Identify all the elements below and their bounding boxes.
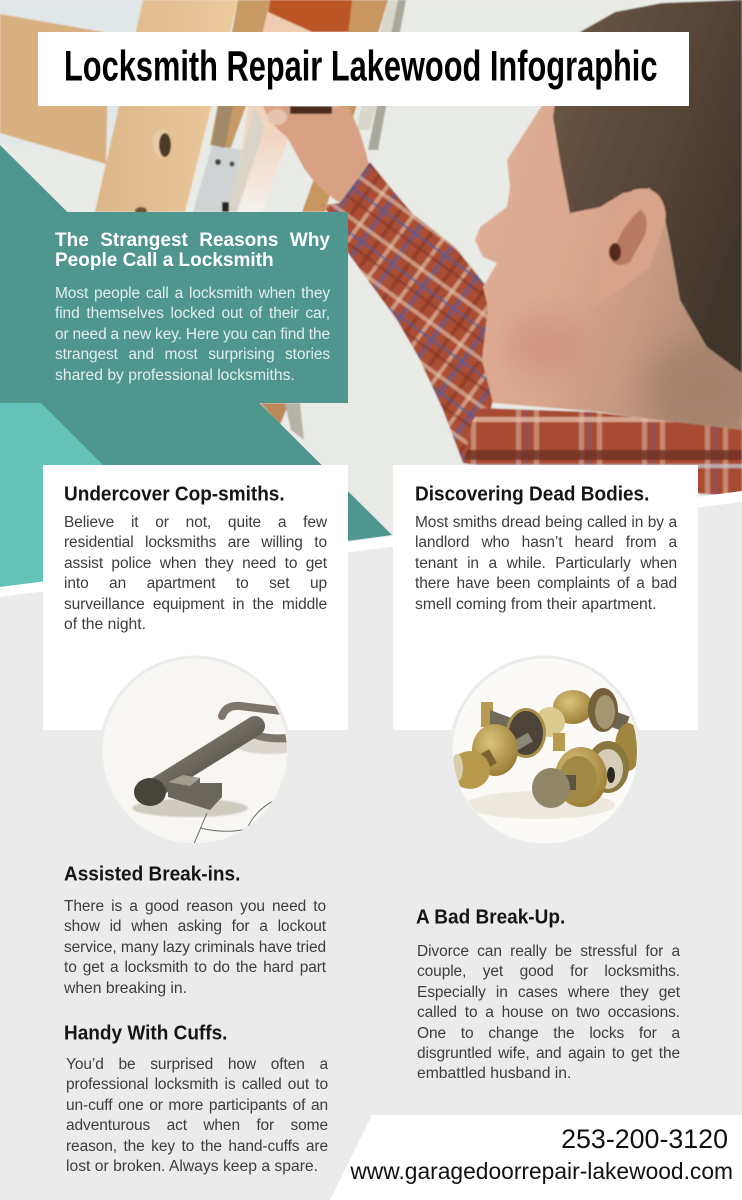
text block: handy with cuffs [64, 1022, 328, 1175]
intro text: Most people call a locksmith when they [55, 285, 330, 302]
grey lower background [0, 502, 742, 1200]
title: Locksmith Repair Lakewood Infographic [64, 43, 657, 91]
heading: A Bad Break-Up. [416, 906, 565, 928]
photo [0, 0, 742, 520]
collar [463, 408, 742, 497]
phone number: 253-200-3120 [561, 1124, 728, 1154]
heading: Undercover Cop-smiths. [64, 483, 285, 506]
body text: Especially in cases where they get [417, 984, 680, 1001]
body text: Divorce can really be stressful for a [417, 943, 680, 960]
body text: reason, the key to the hand-cuffs are [66, 1138, 328, 1155]
body text: disgruntled wife, and again to get the [417, 1045, 680, 1062]
intro heading [55, 232, 330, 270]
right assembly [615, 723, 637, 771]
intro text: or need a new key. Here you can find the [55, 326, 330, 343]
body text: there have been complaints of a bad [415, 575, 677, 592]
key bow [222, 706, 290, 738]
body text: lost or broken. Always keep a spare. [66, 1158, 318, 1175]
panel: introduction [0, 212, 348, 403]
body text: One to change the locks for a [417, 1025, 680, 1042]
intro heading: The Strangest Reasons Why [55, 230, 330, 251]
top knob [612, 712, 630, 730]
ear [592, 189, 666, 307]
body text: residential locksmiths are willing to [64, 534, 327, 551]
body text: couple, yet good for locksmiths. [417, 963, 680, 980]
intro text: shared by professional locksmiths. [55, 367, 295, 384]
body text: adventurous act when for some [66, 1117, 328, 1134]
intro text: strangest and most surprising stories [55, 346, 330, 363]
body text: un-cuff one or more participants of an [66, 1097, 328, 1114]
body text: when breaking in. [64, 980, 187, 997]
body text [417, 943, 680, 1082]
key shaft [152, 726, 255, 790]
dark teal shape [0, 145, 392, 587]
body text [66, 1056, 328, 1175]
contact panel background [330, 1115, 742, 1200]
contact details [350, 1124, 733, 1184]
head and neck [475, 32, 742, 432]
body text [415, 514, 678, 613]
hand [263, 106, 370, 203]
body text: called to a house on two occasions. [417, 1004, 680, 1021]
body text: of the night. [64, 616, 146, 633]
intro text: find themselves locked out of their car, [55, 305, 330, 322]
body text [64, 514, 328, 633]
body text: assist police when they need to get [64, 555, 327, 572]
body text: into an apartment to set up [64, 575, 327, 592]
heading: Handy With Cuffs. [64, 1022, 227, 1044]
body text: show id when asking for a lockout [64, 918, 326, 935]
body text: professional locksmith is called out to [66, 1076, 328, 1093]
key bit [168, 775, 222, 810]
panel: undercover cop-smiths [43, 465, 348, 730]
body text: service, many lazy criminals have tried [64, 939, 326, 956]
body text [64, 898, 326, 997]
image: brass door knobs [452, 656, 638, 844]
text block: a bad break-up [416, 906, 680, 1082]
white band [0, 491, 742, 597]
body text: smell coming from their apartment. [415, 596, 656, 613]
text block: assisted break-ins [64, 863, 326, 997]
body text: Believe it or not, quite a few [64, 514, 327, 531]
left knob [481, 702, 493, 727]
body text: landlord who hasn’t heard from a [415, 534, 677, 551]
body text: tenant in a while. Particularly when [415, 555, 677, 572]
website: www.garagedoorrepair-lakewood.com [350, 1158, 733, 1184]
light teal shape [0, 362, 225, 587]
hair [553, 0, 742, 373]
image: old key [102, 656, 288, 844]
body text: There is a good reason you need to [64, 898, 326, 915]
heading: Discovering Dead Bodies. [415, 483, 649, 506]
body text: You’d be surprised how often a [66, 1056, 328, 1073]
body text: to get a locksmith to do the hard part [64, 959, 326, 976]
panel: discovering dead bodies [393, 465, 698, 730]
intro heading: People Call a Locksmith [55, 250, 274, 271]
title bar [38, 32, 689, 106]
heading: Assisted Break-ins. [64, 863, 240, 886]
sleeve [322, 162, 493, 463]
body text: surveillance equipment in the middle [64, 596, 327, 613]
body text: Most smiths dread being called in by a [415, 514, 677, 531]
pale ball [535, 707, 565, 737]
body text: embattled husband in. [417, 1065, 571, 1082]
intro text [55, 286, 330, 384]
